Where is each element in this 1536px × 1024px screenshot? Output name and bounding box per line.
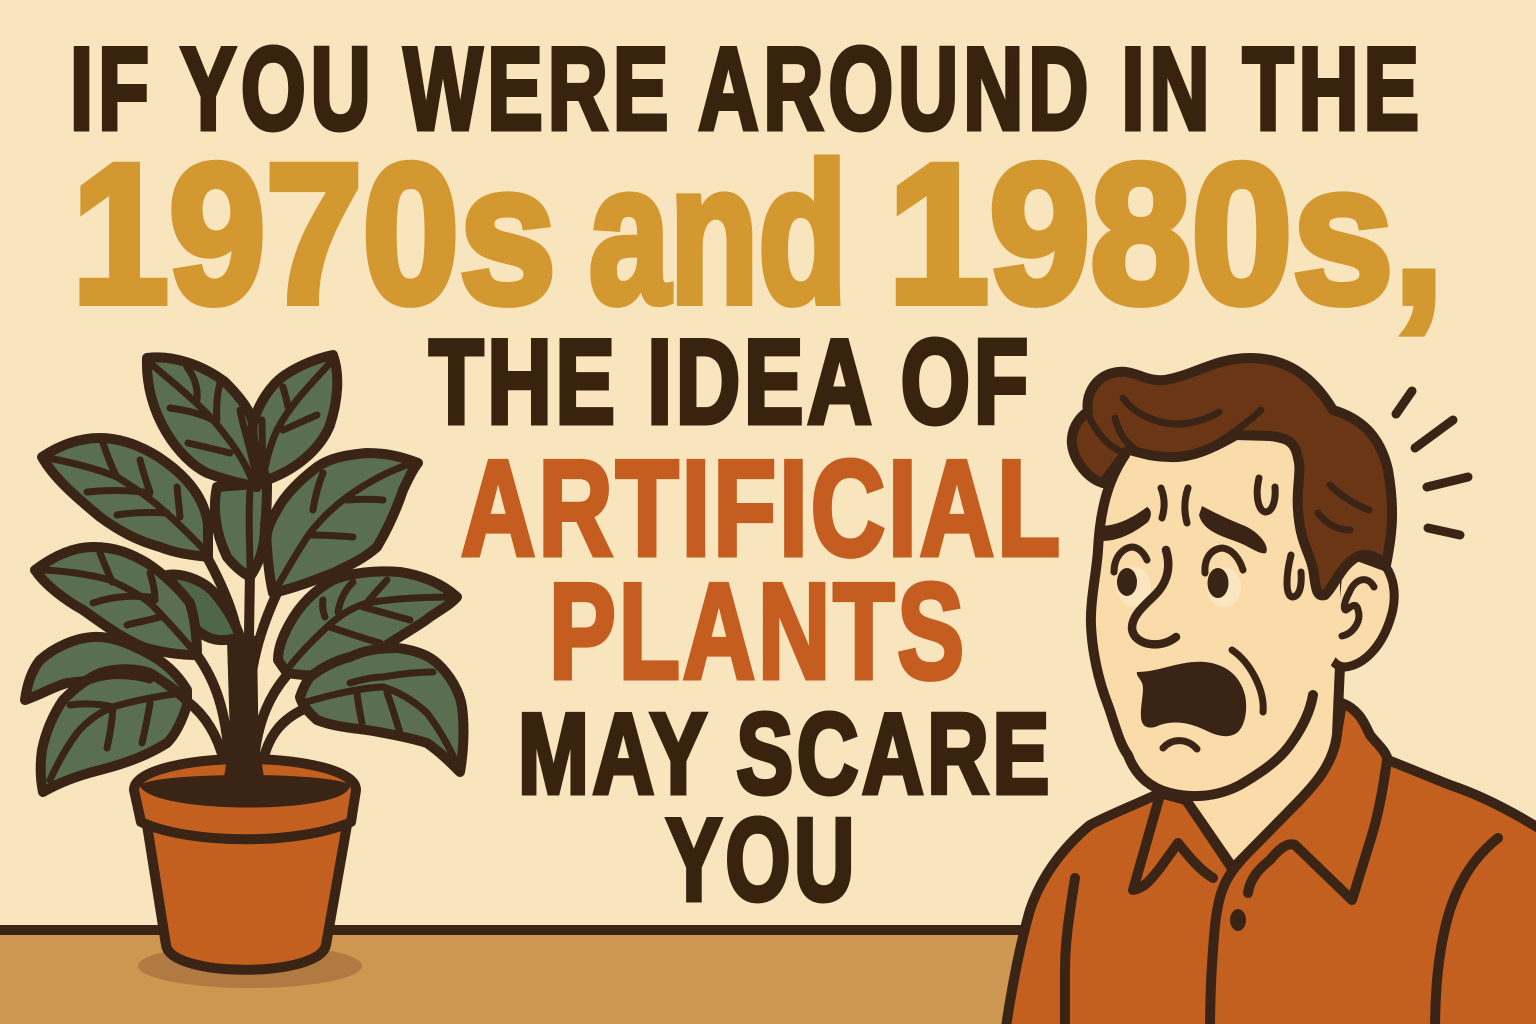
leaf top left	[147, 357, 258, 487]
leaf right mid	[278, 571, 457, 676]
leaf lower left back	[25, 637, 187, 700]
title line 5: plants: PLANTS	[549, 555, 967, 707]
eyebrows	[1102, 506, 1267, 553]
leaf upper right	[266, 453, 418, 593]
title line 6: MAY SCARE	[518, 691, 1053, 818]
leaf behind	[167, 575, 240, 640]
potted plant	[25, 355, 463, 988]
collar and placket	[1065, 760, 1498, 1024]
pot body	[147, 825, 347, 970]
headline	[70, 23, 1444, 925]
leaves	[25, 355, 463, 792]
pot	[134, 745, 356, 970]
mouth	[1137, 662, 1246, 736]
eyes	[1114, 547, 1243, 607]
face	[1091, 420, 1340, 796]
scared man	[1005, 358, 1536, 1024]
table surface	[0, 925, 1536, 1024]
shirt body	[1005, 703, 1536, 1024]
soil	[142, 777, 348, 806]
inner ear	[1342, 580, 1374, 636]
leaf upper left	[42, 438, 208, 557]
shock lines	[1396, 391, 1468, 535]
shirt button	[1231, 910, 1245, 930]
hair strands	[1088, 398, 1369, 530]
leaf veins	[37, 363, 458, 780]
ear	[1330, 550, 1394, 667]
leaf lower left	[41, 669, 188, 792]
title line 4: artificial: ARTIFICIAL	[461, 432, 1063, 584]
sweat and forehead lines	[1161, 478, 1301, 597]
title line 3: THE IDEA OF	[429, 315, 1032, 449]
leaf lower right	[300, 648, 463, 772]
title line 2: decades: 1980s,	[888, 123, 1444, 344]
leaf center	[215, 483, 267, 577]
shirt	[1005, 660, 1536, 1024]
leaf top right	[252, 355, 337, 480]
cheek and chin lines	[1163, 650, 1263, 749]
pot rim	[134, 759, 356, 839]
stems	[188, 557, 302, 770]
nose	[1132, 550, 1176, 644]
title line 2: decades: 1970s	[72, 123, 556, 344]
title line 2: decades: and	[589, 123, 847, 344]
hair	[1072, 358, 1392, 595]
pot shadow	[138, 944, 362, 988]
title line 7: YOU	[666, 794, 858, 925]
leaf mid left	[35, 547, 197, 655]
neck	[1150, 660, 1340, 868]
title line 2: decades	[72, 123, 1444, 344]
